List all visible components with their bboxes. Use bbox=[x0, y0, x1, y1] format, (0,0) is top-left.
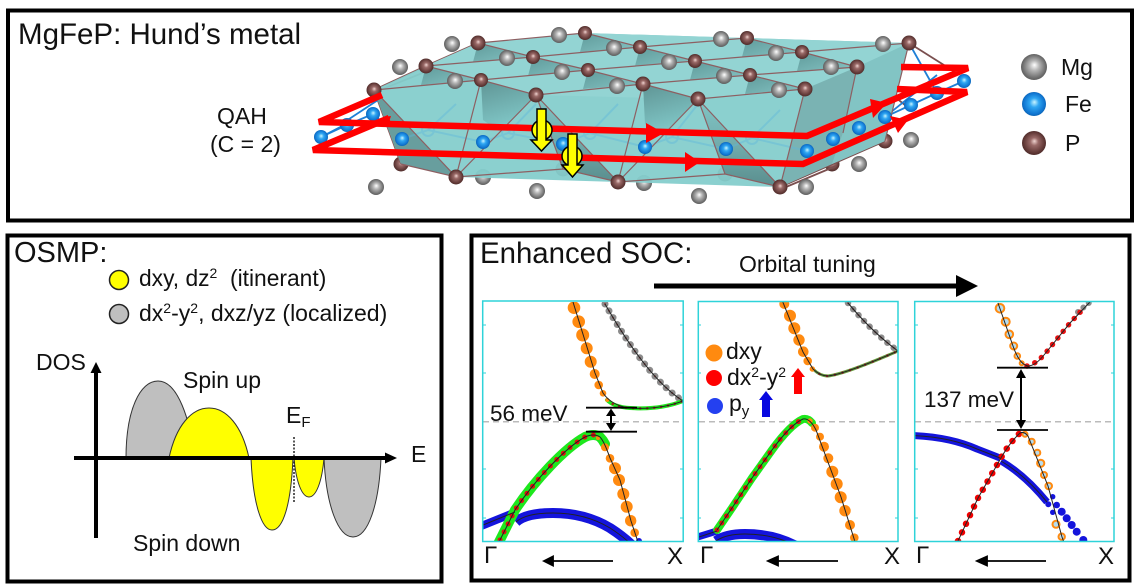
polyhedra base bbox=[374, 33, 909, 187]
polyhedra dark faces bbox=[374, 33, 857, 187]
band plot 1 bbox=[480, 301, 683, 570]
label: orbital tuning: Orbital tuning bbox=[739, 251, 876, 277]
axis labels: Γ bbox=[916, 542, 929, 569]
legend: itinerant: dxy, dz bbox=[139, 265, 210, 291]
axis and spin labels: F bbox=[301, 414, 311, 431]
legend: atoms bbox=[1021, 54, 1093, 156]
orange dots: upper band bbox=[568, 301, 609, 402]
gap marker: 56 meV bbox=[490, 401, 637, 432]
legend: atoms: Fe bbox=[1065, 91, 1092, 117]
legend: itinerant: 2 bbox=[210, 265, 218, 281]
arrow bbox=[544, 556, 613, 566]
back atoms bbox=[394, 134, 892, 191]
polyhedra right faces bbox=[780, 43, 909, 187]
axes bbox=[74, 372, 388, 538]
axis labels bbox=[916, 542, 1114, 570]
heading: Enhanced SOC: Enhanced SOC: bbox=[480, 237, 692, 270]
polyhedra edges bbox=[374, 33, 909, 187]
label: QAH bbox=[210, 103, 281, 157]
blue bands bbox=[480, 512, 516, 526]
Fermi level line bbox=[293, 437, 295, 502]
axis and spin labels: Spin down bbox=[133, 530, 240, 556]
arrow: blue up bbox=[759, 391, 773, 417]
faded iron bonds bbox=[402, 104, 807, 151]
gap marker: 137 meV: 137 meV bbox=[924, 387, 1014, 412]
arrow: orbital tuning bbox=[654, 275, 978, 297]
axis labels: X bbox=[884, 543, 900, 570]
panel: MgFeP Hund's metal bbox=[8, 10, 1132, 220]
legend: orbitals: 2 bbox=[751, 364, 759, 380]
axis labels: X bbox=[667, 543, 683, 570]
orange dots: upper band bbox=[779, 299, 815, 372]
plot frame bbox=[915, 302, 1114, 542]
legend: orbitals: -y bbox=[759, 364, 779, 390]
axis labels: Γ bbox=[700, 542, 713, 569]
green and red band bbox=[717, 419, 812, 530]
black band lines bbox=[699, 300, 898, 547]
legend: atoms: Mg bbox=[1061, 54, 1093, 80]
plot frame bbox=[483, 301, 683, 542]
legend: atoms: P bbox=[1065, 130, 1080, 156]
DOS chart bbox=[36, 349, 426, 556]
legend: orbitals: y bbox=[742, 403, 750, 420]
arrow bbox=[977, 556, 1046, 566]
legend: localized: , dxz/yz (localized) bbox=[198, 300, 387, 326]
yellow spin arrows bbox=[531, 109, 583, 177]
legend: itinerant: (itinerant) bbox=[217, 265, 326, 291]
panel: OSMP bbox=[8, 236, 442, 582]
gray spin-down lobe bbox=[324, 458, 381, 537]
magnesium atoms bbox=[368, 27, 919, 204]
arrow bbox=[768, 556, 838, 566]
iron atoms bbox=[314, 74, 971, 158]
legend: orbitals: dxy bbox=[726, 338, 762, 364]
black band lines bbox=[912, 302, 1090, 548]
gap marker: 56 meV: 56 meV bbox=[490, 401, 568, 426]
orange dots: lower band bbox=[807, 418, 859, 542]
gray band bbox=[848, 303, 898, 351]
axis labels: Γ bbox=[484, 542, 497, 569]
legend: localized: dx bbox=[139, 300, 163, 326]
band plot 3 bbox=[912, 302, 1114, 570]
green and red band bbox=[496, 435, 605, 548]
gray end of band bbox=[1078, 302, 1090, 312]
bonds outside polyhedra bbox=[321, 43, 964, 187]
legend: orbitals: dx bbox=[727, 364, 751, 390]
legend: itinerant bbox=[110, 265, 326, 291]
axis and spin labels: Spin up bbox=[183, 367, 261, 393]
blue dots bbox=[1045, 494, 1087, 544]
label: QAH: QAH bbox=[217, 103, 267, 129]
axis labels bbox=[484, 542, 683, 570]
thin upper band bbox=[813, 351, 898, 376]
axis labels bbox=[700, 542, 900, 570]
yellow spin-down lobes bbox=[251, 458, 324, 530]
red bands bbox=[958, 432, 1025, 541]
legend: localized bbox=[110, 300, 387, 326]
orange ring dots: upper band bbox=[996, 304, 1024, 365]
legend: localized: -y bbox=[171, 300, 191, 326]
gray spin-up hump bbox=[126, 381, 195, 458]
black band lines bbox=[483, 302, 683, 548]
crystal structure bbox=[314, 26, 971, 204]
legend: localized: 2 bbox=[190, 300, 198, 316]
band plot 2 bbox=[696, 299, 900, 570]
orange dots: lower band bbox=[596, 436, 639, 537]
heading: OSMP: OSMP: bbox=[14, 237, 107, 269]
red edge-state arrows bbox=[313, 67, 968, 172]
axis and spin labels bbox=[36, 349, 426, 556]
yellow spin-up hump bbox=[169, 408, 249, 458]
arrow: red up bbox=[791, 368, 805, 394]
phosphorus atoms bbox=[366, 26, 916, 194]
blue bands bbox=[696, 531, 717, 538]
legend: orbitals: p bbox=[729, 390, 742, 416]
gap marker: 137 meV bbox=[924, 368, 1048, 430]
polyhedra rear faces bbox=[426, 33, 909, 99]
gray band bbox=[605, 304, 683, 401]
axis and spin labels: E bbox=[411, 441, 426, 467]
axis and spin labels: E bbox=[286, 402, 301, 428]
orange ring dots: lower band bbox=[1022, 432, 1065, 540]
blue bands bbox=[912, 436, 1000, 458]
panel: Enhanced SOC bbox=[472, 236, 1130, 580]
plot frame bbox=[698, 302, 898, 542]
legend: localized: 2 bbox=[163, 300, 171, 316]
axis and spin labels: DOS bbox=[36, 349, 86, 375]
axis labels: X bbox=[1098, 543, 1114, 570]
legend: orbitals bbox=[706, 338, 786, 420]
label: QAH: (C = 2) bbox=[210, 131, 281, 157]
title: MgFeP: MgFeP: Hund’s metal bbox=[18, 18, 301, 51]
legend: orbitals: 2 bbox=[778, 364, 786, 380]
